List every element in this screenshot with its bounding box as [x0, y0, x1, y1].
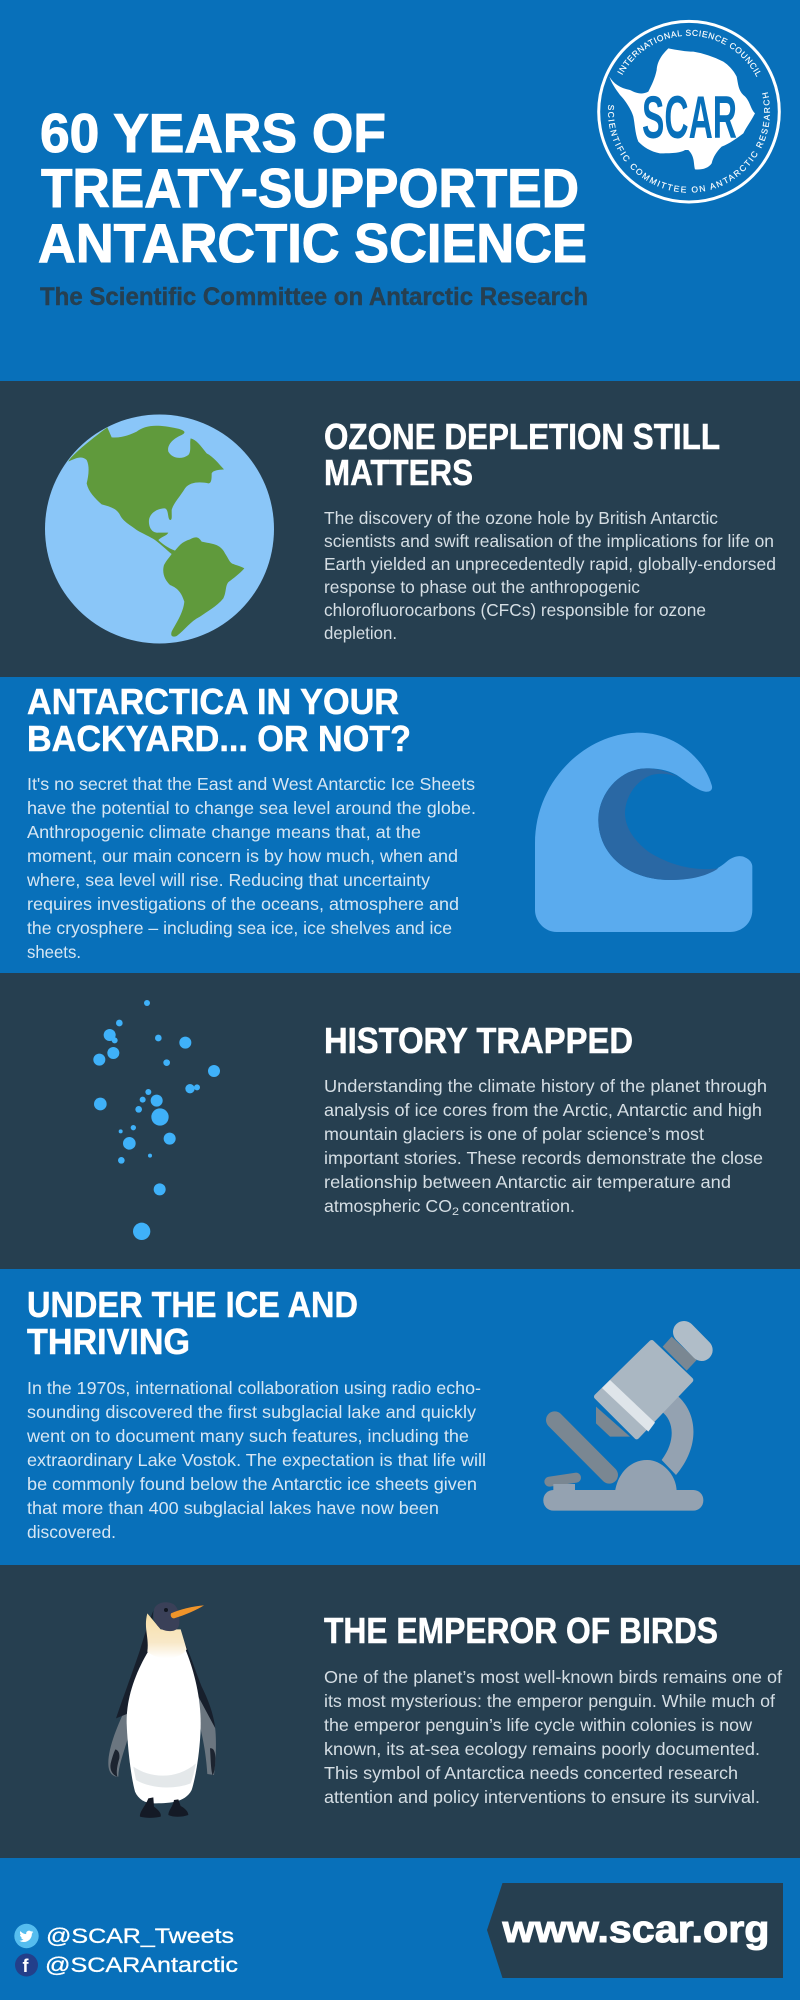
text: history body: concentration. — [462, 1196, 575, 1216]
text: ozone body: Earth yielded an unprecedentedly rapid, globally-endorsed — [324, 554, 776, 574]
text: emperor body: One of the planet’s most well-known birds remains one of — [324, 1667, 782, 1687]
heading: sea level: BACKYARD... OR NOT? — [27, 718, 411, 759]
text: under the ice body: be commonly found below the Antarctic ice sheets given — [27, 1474, 477, 1494]
text: history body: analysis of ice cores from the Arctic, Antarctic and high — [324, 1100, 762, 1120]
heading: sea level: ANTARCTICA IN YOUR — [27, 681, 399, 722]
text: ozone body: depletion. — [324, 623, 397, 643]
heading: emperor: THE EMPEROR OF BIRDS — [324, 1610, 718, 1651]
title — [38, 102, 587, 274]
text: history body: Understanding the climate history of the planet through — [324, 1076, 767, 1096]
text: under the ice body: extraordinary Lake Vostok. The expectation is that life will — [27, 1450, 486, 1470]
title: 60 YEARS OF — [40, 102, 386, 164]
subtitle: The Scientific Committee on Antarctic Research — [40, 283, 588, 311]
text: under the ice body: In the 1970s, international collaboration using radio echo- — [27, 1378, 481, 1398]
heading: ozone — [324, 416, 720, 493]
text: under the ice body: went on to document many such features, including the — [26, 1426, 469, 1446]
icon: twitter — [14, 1924, 39, 1948]
icon: microscope — [543, 1332, 703, 1511]
text: sea level body: the cryosphere – including sea ice, ice shelves and ice — [27, 918, 452, 938]
title: ANTARCTIC SCIENCE — [38, 212, 587, 274]
text: sea level body: requires investigations of the oceans, atmosphere and — [27, 894, 459, 914]
facebook handle: @SCARAntarctic — [45, 1954, 238, 1977]
heading: sea level — [27, 681, 411, 759]
panel: sea level — [0, 677, 800, 973]
heading: ozone: OZONE DEPLETION STILL — [324, 416, 720, 457]
heading: under the ice: THRIVING — [27, 1321, 190, 1362]
panel: header — [38, 20, 781, 311]
icon: air bubbles — [93, 1000, 220, 1240]
icon: earth globe — [45, 414, 274, 644]
panel: under the ice — [0, 1269, 800, 1565]
logo: SCAR roundel: SCIENTIFIC COMMITTEE ON ANTARCTIC RESEARCH — [608, 92, 770, 193]
text: history body: important stories. These records demonstrate the close — [324, 1148, 763, 1168]
text: under the ice body: that more than 400 subglacial lakes have now been — [27, 1498, 439, 1518]
text: under the ice body: sounding discovered the first subglacial lake and quickly — [27, 1402, 476, 1422]
website banner: www.scar.org — [501, 1909, 770, 1951]
logo: SCAR roundel — [597, 20, 781, 204]
text: ozone body: The discovery of the ozone hole by British Antarctic — [324, 508, 718, 528]
text: ozone body — [324, 508, 776, 643]
text: history body: atmospheric CO — [324, 1196, 452, 1216]
text: emperor body: This symbol of Antarctica needs concerted research — [324, 1763, 738, 1783]
heading: ozone: MATTERS — [324, 452, 473, 493]
text: sea level body: where, sea level will rise. Reducing that uncertainty — [26, 870, 430, 890]
twitter handle: @SCAR_Tweets — [46, 1925, 234, 1948]
text: sea level body — [26, 774, 476, 962]
panel: footer — [0, 1858, 800, 2000]
text: emperor body: its most mysterious: the emperor penguin. While much of — [324, 1691, 775, 1711]
text: sea level body: Anthropogenic climate change means that, at the — [27, 822, 421, 842]
text: history body: relationship between Antarctic air temperature and — [324, 1172, 731, 1192]
icon: wave — [535, 733, 752, 932]
text: emperor body: attention and policy interventions to ensure its survival. — [324, 1787, 760, 1807]
text: sea level body: have the potential to change sea level around the globe. — [27, 798, 476, 818]
text: ozone body: scientists and swift realisation of the implications for life on — [324, 531, 774, 551]
heading: history trapped: HISTORY TRAPPED — [324, 1020, 633, 1061]
text: sea level body: moment, our main concern is by how much, when and — [27, 846, 458, 866]
text: ozone body: response to phase out the anthropogenic — [324, 577, 640, 597]
text: under the ice body — [26, 1378, 486, 1542]
text: history body: mountain glaciers is one of polar science’s most — [324, 1124, 704, 1144]
icon: penguin — [108, 1602, 216, 1818]
text: history body: 2 — [452, 1206, 459, 1218]
text: emperor body — [324, 1667, 782, 1807]
text: history body — [324, 1076, 767, 1218]
text: under the ice body: discovered. — [27, 1522, 116, 1542]
panel: history trapped — [0, 973, 800, 1269]
text: sea level body: It's no secret that the East and West Antarctic Ice Sheets — [27, 774, 475, 794]
text: emperor body: the emperor penguin’s life cycle within colonies is now — [324, 1715, 752, 1735]
heading: under the ice: UNDER THE ICE AND — [27, 1284, 358, 1325]
heading: under the ice — [27, 1284, 358, 1362]
panel: ozone depletion — [0, 381, 800, 677]
text: sea level body: sheets. — [27, 942, 81, 962]
icon: facebook: f — [22, 1956, 30, 1976]
website banner — [487, 1883, 783, 1978]
title: TREATY-SUPPORTED — [41, 157, 579, 219]
text: ozone body: chlorofluorocarbons (CFCs) responsible for ozone — [324, 600, 706, 620]
panel: emperor penguin — [0, 1565, 800, 1858]
icon: facebook — [15, 1954, 38, 1976]
text: emperor body: known, its at-sea ecology remains poorly documented. — [324, 1739, 760, 1759]
logo: SCAR roundel: INTERNATIONAL SCIENCE COUNCIL — [617, 30, 760, 77]
